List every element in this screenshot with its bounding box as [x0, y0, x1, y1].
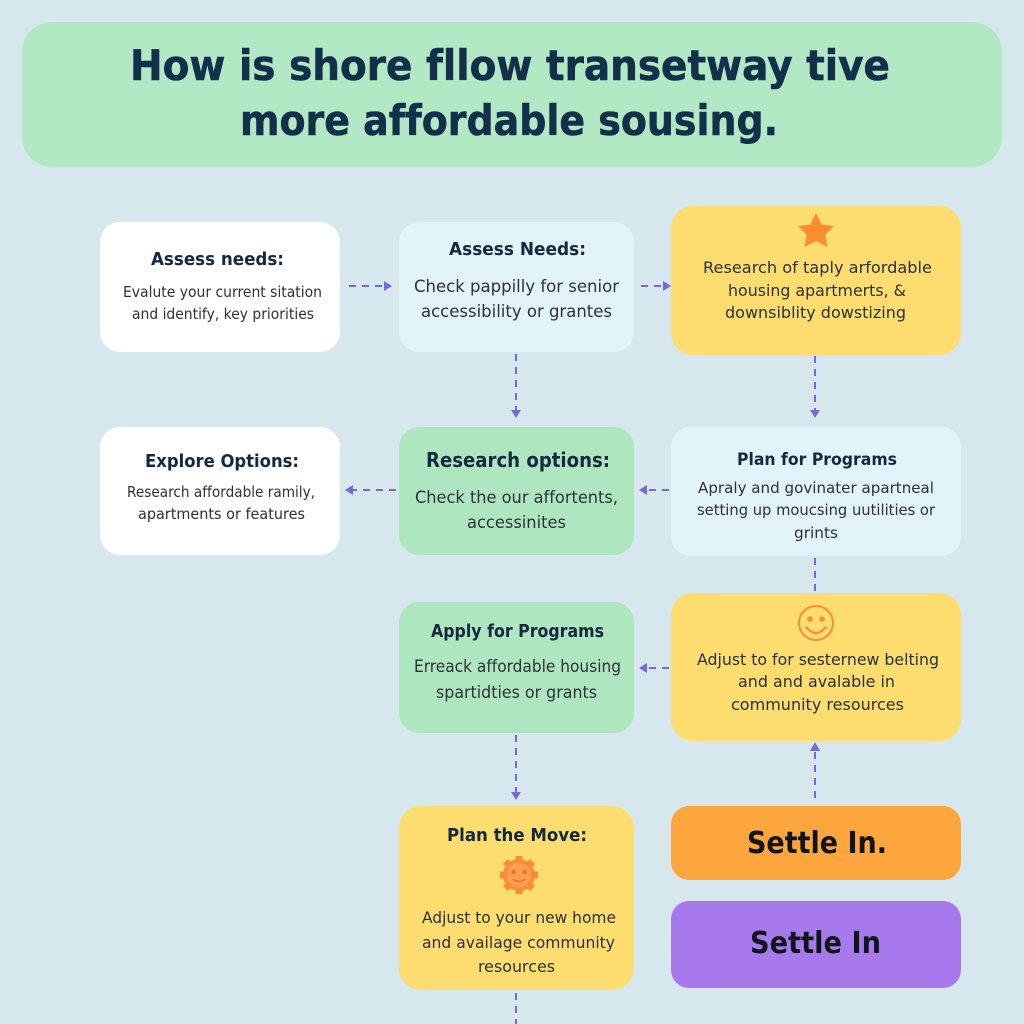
panel: adjust to belting [671, 593, 961, 741]
panel: settle in purple [671, 901, 961, 988]
panel: plan the move: Plan the Move: [447, 825, 587, 846]
panel: plan for programs: Apraly and govinater apartneal [698, 479, 934, 497]
arrow: plan for programs to research options [639, 485, 669, 495]
panel: explore options: apartments or features [138, 505, 305, 523]
icon: smiley [799, 606, 833, 640]
panel: research affordable housing [671, 206, 961, 355]
panel: research options: Check the our affortents, [415, 488, 618, 508]
arrow: assess needs down to research options [511, 354, 521, 418]
panel: apply for programs: spartidties or grants [436, 683, 597, 702]
panel: plan for programs: Plan for Programs [737, 450, 897, 470]
arrow: adjust to apply for programs [639, 663, 669, 673]
title banner: more affordable sousing. [240, 96, 778, 145]
panel: assess needs (white) [100, 222, 340, 352]
panel: apply for programs [399, 602, 634, 733]
panel: assess needs (blue): Check pappilly for senior [414, 277, 619, 297]
panel: research affordable housing: housing apartmerts, & [728, 281, 906, 300]
arrow: settle in up to adjust [810, 742, 820, 798]
panel: adjust to belting: Adjust to for sesternew belting [697, 650, 939, 669]
panel: research options [399, 427, 634, 555]
panel: settle in purple: Settle In [750, 926, 881, 961]
panel: settle in orange: Settle In. [747, 826, 887, 861]
connector: plan the move continues down [515, 993, 517, 1024]
panel: assess needs (white): and identify, key priorities [132, 305, 314, 323]
arrow: assess needs to assess needs blue [349, 281, 392, 291]
panel: assess needs (white): Assess needs: [151, 249, 284, 270]
panel: settle in orange [671, 806, 961, 880]
panel: plan the move: and availage community [422, 933, 615, 952]
panel: assess needs (white): Evalute your current sitation [123, 283, 322, 301]
arrow: assess needs to research [641, 281, 671, 291]
panel: plan the move [399, 806, 634, 990]
panel: assess needs (blue) [399, 222, 634, 352]
panel: plan for programs [671, 427, 961, 556]
title banner [22, 22, 1002, 167]
panel: apply for programs: Apply for Programs [431, 621, 604, 642]
panel: assess needs (blue): accessibility or grantes [421, 302, 612, 322]
panel: plan for programs: grints [794, 524, 838, 542]
icon: star [798, 213, 834, 247]
panel: apply for programs: Erreack affordable housing [414, 657, 621, 676]
panel: explore options: Research affordable ramily, [127, 483, 315, 501]
arrow: research down to plan for programs [810, 356, 820, 418]
arrow: research options to explore options [345, 485, 396, 495]
panel: explore options: Explore Options: [145, 451, 299, 472]
panel: plan the move: resources [478, 957, 555, 976]
panel: plan for programs: setting up moucsing uutilities or [697, 501, 936, 519]
title banner: How is shore fllow transetway tive [130, 41, 890, 90]
panel: assess needs (blue): Assess Needs: [449, 239, 586, 260]
panel: research options: Research options: [426, 448, 610, 472]
panel: adjust to belting: and and avalable in [738, 672, 895, 691]
panel: adjust to belting: community resources [731, 695, 904, 714]
arrow: apply for programs down to plan the move [511, 735, 521, 800]
icon: smiling gear [500, 856, 538, 894]
panel: plan the move: Adjust to your new home [422, 908, 616, 927]
panel: research affordable housing: Research of taply arfordable [703, 258, 932, 277]
panel: research options: accessinites [467, 513, 566, 533]
panel: research affordable housing: downsiblity dowstizing [725, 303, 906, 322]
connector: plan for programs to adjust [814, 558, 816, 593]
panel: explore options [100, 427, 340, 555]
